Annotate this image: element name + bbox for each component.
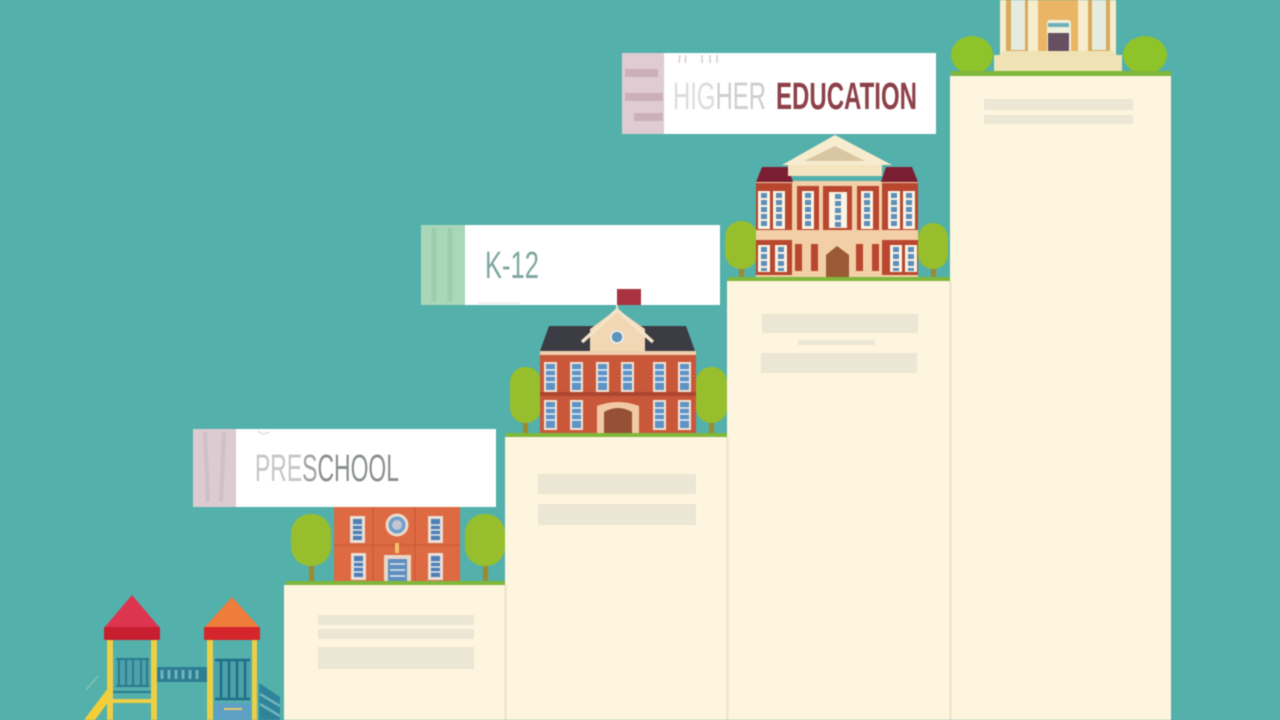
stairs [259, 683, 280, 720]
colour tab [193, 429, 236, 507]
panel: step 4 graduate level [950, 0, 1171, 720]
panel: step 3 higher education [725, 135, 950, 720]
label card: K-12 [421, 225, 720, 305]
panel: step 2 K-12 [505, 297, 727, 720]
text placeholder bars [984, 99, 1133, 124]
icon: university building [725, 135, 948, 278]
flag [617, 289, 641, 305]
column [950, 76, 1171, 720]
label card: higher education [622, 53, 936, 134]
colour tab [622, 53, 664, 134]
text placeholder bars [761, 314, 918, 373]
label text: PRESCHOOL [255, 448, 399, 490]
colour tab [421, 225, 465, 305]
left tower [107, 640, 113, 720]
label text: K-12 [485, 245, 539, 287]
icon: top building [951, 0, 1167, 74]
column seams [506, 281, 950, 720]
ground strip [286, 581, 505, 585]
right tower [207, 640, 213, 720]
column [505, 437, 727, 720]
ground strip [506, 433, 727, 438]
label card: preschool [193, 429, 496, 507]
ground strip [951, 71, 1171, 76]
icon: preschool building [291, 507, 505, 583]
ground strip [728, 277, 950, 282]
panel: step 1 preschool [284, 507, 505, 720]
label card: higher education: EDUCATION [776, 76, 917, 118]
column [727, 281, 950, 720]
icon: school building with flag [510, 297, 727, 434]
label text: HIGHER [673, 76, 766, 118]
text placeholder bars [318, 615, 474, 669]
slide [84, 688, 111, 720]
column [284, 585, 505, 720]
icon: playground [84, 595, 280, 720]
text placeholder bars [538, 474, 696, 525]
bridge [157, 667, 207, 682]
